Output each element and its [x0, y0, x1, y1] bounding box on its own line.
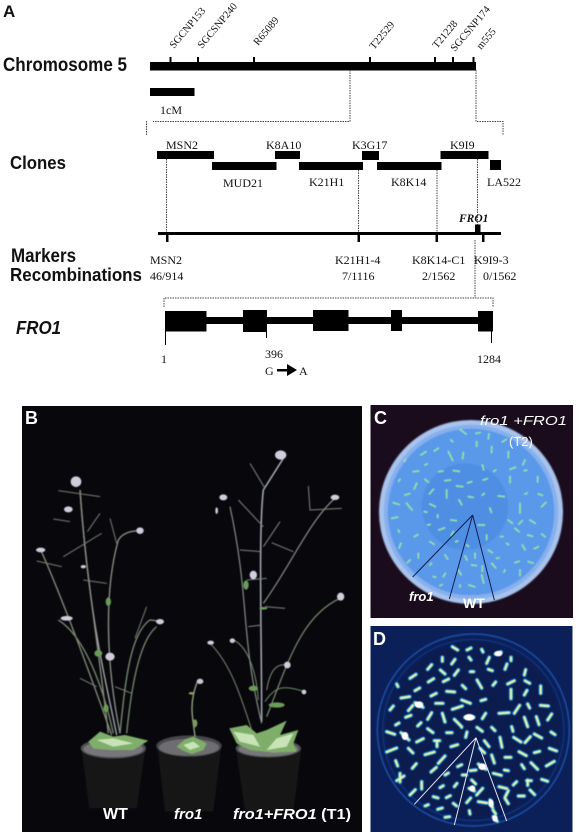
- sector lines: [414, 738, 507, 825]
- seedling luminescence spots: [387, 647, 557, 821]
- plate rim: [377, 634, 569, 826]
- gene position labels and G to A mutation arrow: 1: [161, 352, 167, 366]
- label WT sector: WT: [463, 595, 485, 611]
- marker names and recombination counts: 0/1562: [483, 269, 516, 283]
- chromosome marker labels: R65089: [252, 15, 282, 48]
- panel C: seedling plate under light: [370, 405, 573, 618]
- gene position labels and G to A mutation arrow: 1284: [477, 352, 501, 366]
- chromosome bar with marker ticks: [150, 57, 476, 70]
- scale bar 1cM: [150, 88, 194, 117]
- chromosome marker labels: SGCSNP240: [196, 1, 240, 51]
- pots: [81, 735, 301, 812]
- guide brackets to gene model: [164, 240, 493, 307]
- clone labels: K8A10: [266, 138, 301, 152]
- panel label C: C: [374, 408, 387, 428]
- dotted guides from clones to markers: [166, 159, 478, 233]
- fro1 stem: [192, 680, 200, 737]
- plants and pots: [36, 450, 344, 812]
- seedlings: [392, 429, 546, 587]
- marker names and recombination counts: MSN2: [150, 253, 182, 267]
- label fro1: fro1: [174, 806, 202, 823]
- panel label D: D: [373, 629, 386, 649]
- panel D: luminescence image of plate: [370, 626, 572, 832]
- chromosome marker labels: [168, 1, 499, 54]
- sector lines: [413, 515, 494, 600]
- panel A: genetic map: [3, 1, 521, 378]
- bright saturated seedlings: [402, 651, 502, 822]
- rosettes: [88, 721, 298, 754]
- clone labels: K21H1: [309, 175, 344, 189]
- zoom guide lines from chromosome to clones: [146, 70, 503, 135]
- marker names and recombination counts: 46/914: [150, 269, 183, 283]
- gene position labels and G to A mutation arrow: A: [299, 364, 308, 378]
- heading: FRO1 gene: FRO1: [16, 317, 61, 338]
- scale bar 1cM: 1cM: [160, 103, 182, 117]
- chromosome marker labels: T21228: [431, 19, 460, 51]
- clone bars: [157, 151, 501, 170]
- gene position labels and G to A mutation arrow: [161, 347, 501, 378]
- clone labels: [166, 138, 521, 190]
- marker names and recombination counts: K8K14-C1: [412, 253, 465, 267]
- FRO1 locus label: FRO1: [458, 213, 488, 225]
- clone labels: K9I9: [450, 138, 475, 152]
- label fro1 sector: fro1: [409, 589, 434, 604]
- chromosome marker labels: T22529: [368, 20, 397, 52]
- panel B: plant photograph: [22, 406, 362, 832]
- chromosome marker labels: SGCNP153: [168, 6, 208, 51]
- label fro1 +FRO1: fro1 +FRO1: [480, 413, 567, 428]
- panel label B: B: [25, 408, 38, 428]
- panel label A: A: [3, 2, 15, 21]
- clone labels: MSN2: [166, 138, 198, 152]
- fro1+FRO1 stems: [210, 458, 342, 730]
- heading: Recombinations: Recombinations: [10, 264, 142, 285]
- gene position labels and G to A mutation arrow: G: [265, 364, 274, 378]
- marker names and recombination counts: 7/1116: [342, 269, 374, 283]
- marker names and recombination counts: K9I9-3: [474, 253, 509, 267]
- label T2: (T2): [509, 434, 533, 449]
- WT flowers: [36, 476, 164, 661]
- label fro1+FRO1 (T1): fro1+FRO1 (T1): [233, 806, 351, 823]
- marker names and recombination counts: K21H1-4: [335, 253, 380, 267]
- WT stems: [37, 490, 163, 735]
- clone labels: K8K14: [391, 175, 426, 189]
- clone labels: K3G17: [352, 138, 387, 152]
- heading: Chromosome 5: Chromosome 5: [3, 55, 127, 76]
- heading: Clones: Clones: [10, 152, 66, 173]
- heading: Markers: Markers: [11, 246, 76, 267]
- gene model: exons and introns: [165, 310, 493, 345]
- chromosome marker labels: SGCSNP174: [449, 4, 493, 54]
- chromosome marker labels: m555: [475, 27, 499, 52]
- label WT: WT: [103, 806, 128, 823]
- gene position labels and G to A mutation arrow: 396: [265, 347, 283, 361]
- agar plate: [379, 420, 563, 604]
- clone labels: MUD21: [223, 176, 263, 190]
- marker names and recombination counts: [150, 253, 516, 283]
- marker names and recombination counts: 2/1562: [422, 269, 455, 283]
- marker line with ticks: [158, 224, 501, 242]
- clone labels: LA522: [487, 175, 521, 189]
- fro1+FRO1 flowers: [207, 450, 344, 694]
